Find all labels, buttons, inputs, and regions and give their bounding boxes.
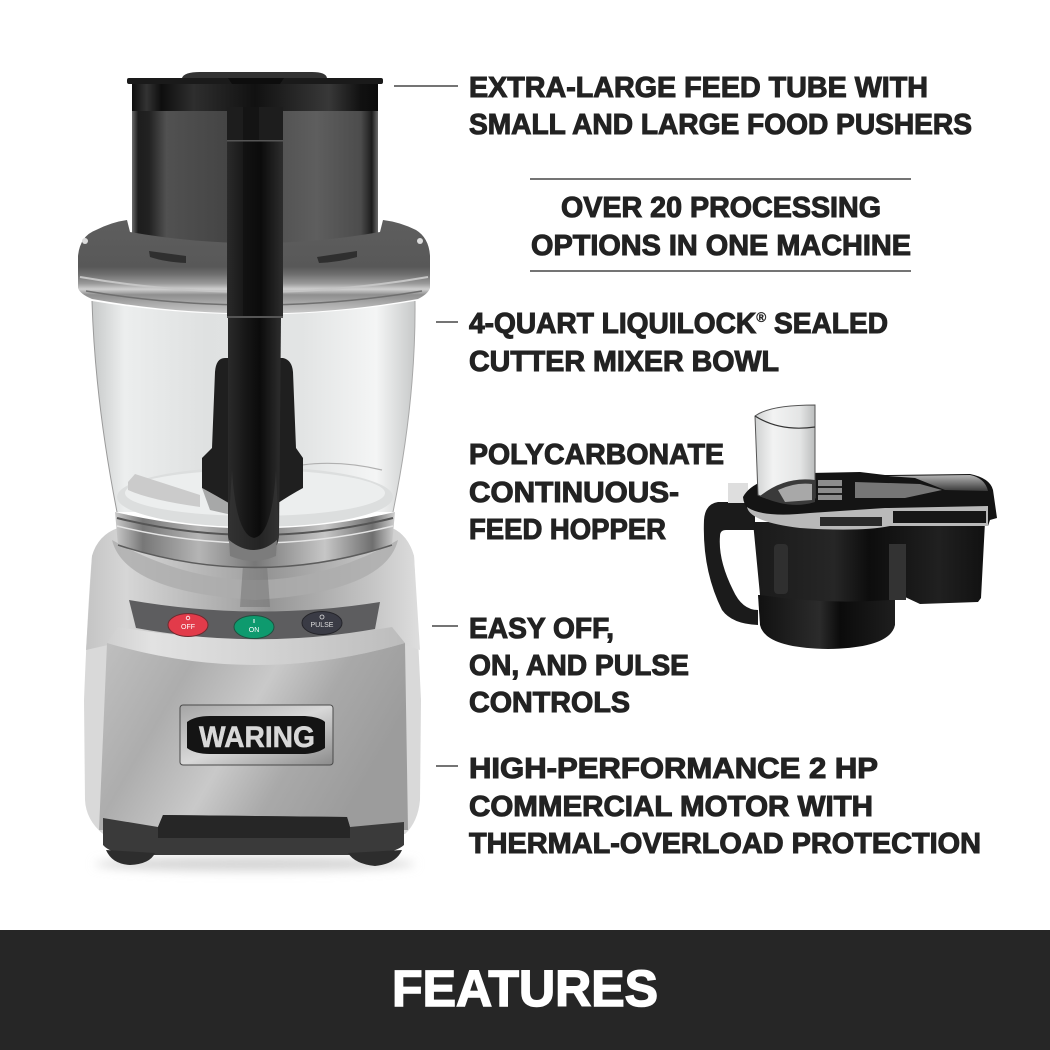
callout: processing options: OPTIONS IN ONE MACHINE (531, 230, 911, 262)
lid right translucent panel (888, 475, 988, 491)
callout: bowl (436, 308, 888, 378)
bowl collar (115, 512, 395, 568)
callout: motor (436, 753, 981, 860)
clear feed chute (755, 405, 815, 503)
callout: motor: THERMAL-OVERLOAD PROTECTION (469, 828, 981, 860)
clear tab at lid left (728, 483, 748, 503)
callout: bowl: ® (756, 309, 767, 325)
bowl floor and blade (117, 467, 393, 527)
front face (99, 643, 408, 830)
lid clip (818, 480, 842, 500)
pulse button: PULSE (311, 622, 334, 629)
callout: controls (432, 613, 689, 719)
hopper lid (743, 472, 997, 530)
lower cylinder (758, 595, 895, 649)
drop shadow under machine (95, 857, 415, 871)
on button: ON (249, 627, 259, 634)
callout: hopper: POLYCARBONATE (469, 439, 724, 471)
control panel (129, 600, 380, 639)
brand badge: WARING (199, 721, 315, 754)
banner: features (0, 930, 1050, 1050)
off button (168, 614, 208, 636)
collar recess (112, 540, 398, 600)
callout: hopper (469, 439, 724, 546)
callout: feed tube: SMALL AND LARGE FOOD PUSHERS (469, 109, 972, 141)
callout: bowl: 4-QUART LIQUILOCK (469, 308, 765, 340)
hopper accessory (704, 405, 997, 649)
centre stem (202, 358, 303, 515)
main product: food processor (78, 72, 430, 871)
lid label patch (855, 482, 942, 498)
callout: controls: ON, AND PULSE (469, 650, 689, 682)
feed tube assembly (127, 72, 383, 244)
hopper body (753, 522, 985, 604)
callout: feed tube (394, 72, 972, 141)
callout: processing options (530, 179, 911, 271)
callout: motor: COMMERCIAL MOTOR WITH (469, 791, 873, 823)
callout: hopper: FEED HOPPER (469, 514, 666, 546)
base dark foot band (103, 815, 404, 866)
handle (704, 502, 758, 625)
pulse button (302, 612, 342, 634)
callout: controls: CONTROLS (469, 687, 630, 719)
base body (84, 528, 421, 834)
banner: features: FEATURES (392, 960, 658, 1017)
callout: controls: EASY OFF, (469, 613, 614, 645)
shoulder highlight band (107, 627, 405, 665)
callout: bowl: CUTTER MIXER BOWL (469, 346, 779, 378)
on button (234, 616, 274, 638)
clear bowl (92, 301, 415, 527)
brand badge (180, 705, 333, 765)
callout: hopper: CONTINUOUS- (469, 477, 679, 509)
food pusher (227, 107, 283, 561)
callout: feed tube: EXTRA-LARGE FEED TUBE WITH (469, 72, 928, 104)
bowl lid (78, 220, 430, 314)
off button: OFF (181, 624, 195, 631)
body ridges (774, 544, 788, 594)
callout: motor: HIGH-PERFORMANCE 2 HP (469, 753, 878, 785)
lid rim (747, 506, 988, 530)
callout: bowl: SEALED (766, 308, 888, 340)
callout: processing options: OVER 20 PROCESSING (561, 192, 881, 224)
